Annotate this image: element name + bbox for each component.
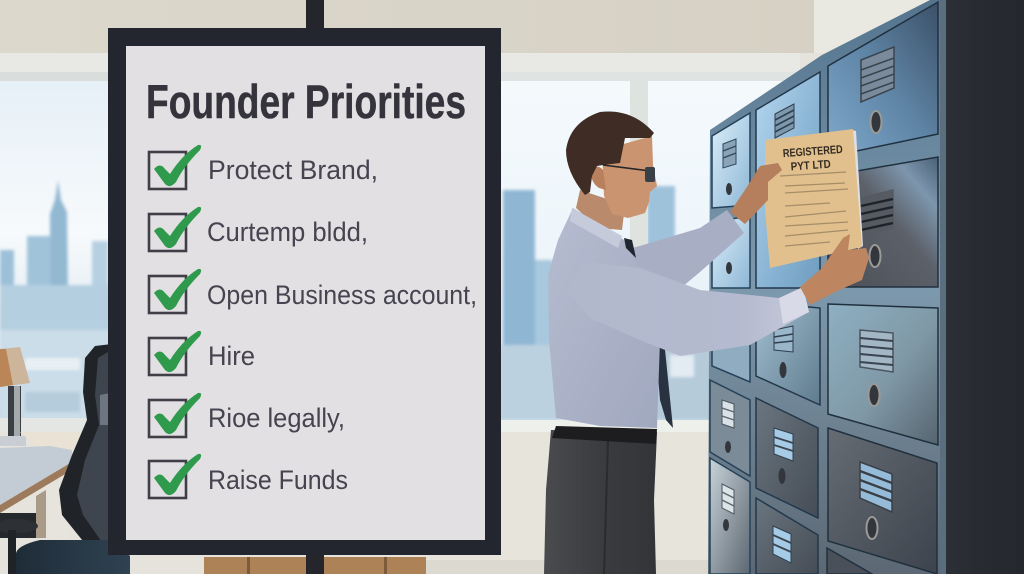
front hand bbox=[800, 234, 869, 305]
locker frame bbox=[708, 0, 950, 574]
column 2 doors bbox=[756, 72, 820, 574]
desk bbox=[0, 432, 80, 574]
shirt torso bbox=[548, 208, 660, 428]
checklist item 3 bbox=[149, 269, 477, 313]
neck bbox=[576, 190, 625, 230]
lower wall and baseboard bbox=[426, 432, 716, 574]
checklist item 5: Rioe legally, bbox=[208, 403, 345, 433]
filing lockers bbox=[708, 0, 1024, 574]
checklist item 2: Curtemp bldd, bbox=[207, 217, 368, 247]
back hand bbox=[730, 163, 782, 224]
support pole and wooden base bbox=[204, 0, 426, 574]
vents bbox=[722, 47, 894, 563]
panel: founder priorities board bbox=[108, 28, 501, 555]
office chair bbox=[16, 344, 130, 574]
back arm bbox=[626, 210, 744, 292]
checklist item 2 bbox=[149, 207, 368, 251]
lower tie bbox=[655, 340, 673, 428]
collar bbox=[570, 208, 622, 248]
checklist item 6: Raise Funds bbox=[208, 465, 348, 495]
document: REGISTERED bbox=[782, 144, 843, 160]
dark cabinet side bbox=[945, 0, 1024, 574]
checklist item 1 bbox=[149, 145, 378, 189]
column 3 doors bbox=[710, 113, 750, 574]
head bbox=[566, 111, 657, 218]
title: Founder Priorities bbox=[146, 75, 466, 128]
desk lamp bbox=[0, 347, 30, 446]
column 1 doors bbox=[827, 2, 938, 574]
trousers bbox=[544, 430, 657, 574]
upper tie bbox=[624, 238, 636, 258]
checklist item 3: Open Business account, bbox=[207, 280, 477, 310]
document: PYT LTD bbox=[790, 159, 831, 173]
document bbox=[765, 129, 863, 268]
desk, lamp and chair bbox=[0, 344, 130, 574]
left window with skyline bbox=[0, 81, 112, 432]
checklist item 6 bbox=[149, 454, 348, 498]
front arm bbox=[567, 262, 809, 356]
man pinning document bbox=[544, 111, 869, 574]
checklist item 5 bbox=[149, 393, 345, 437]
checklist item 4: Hire bbox=[208, 341, 255, 371]
checklist item 4 bbox=[149, 331, 255, 375]
belt bbox=[552, 426, 657, 444]
right window with skyline bbox=[500, 53, 800, 432]
knobs bbox=[723, 111, 882, 539]
checklist item 1: Protect Brand, bbox=[208, 155, 378, 185]
